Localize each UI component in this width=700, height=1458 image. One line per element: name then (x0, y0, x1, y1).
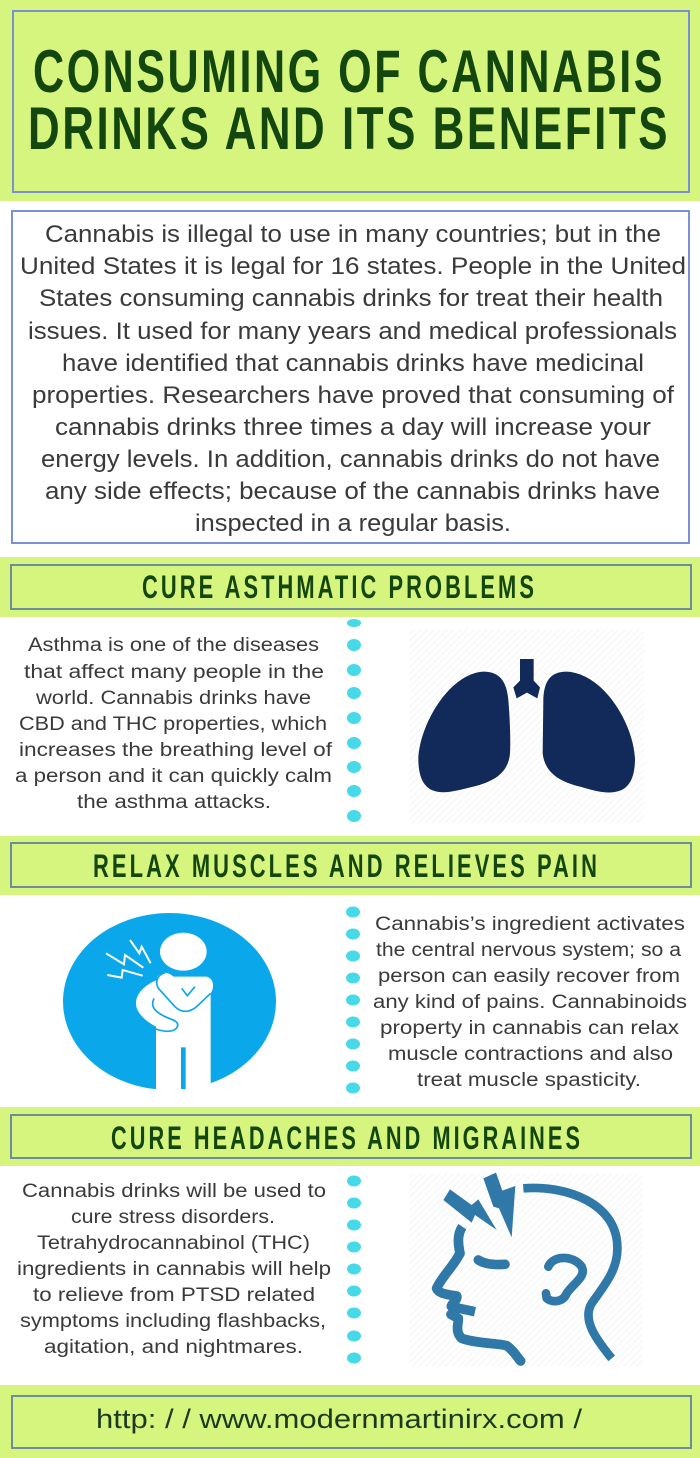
panel: introduction text: United States it is legal for 16 states. People in the United (20, 253, 686, 280)
icon: person with shoulder pain (63, 913, 276, 1090)
dotted divider: muscles (346, 906, 360, 1094)
text block: muscles: property in cannabis can relax (380, 1018, 680, 1039)
panel: introduction text: inspected in a regular basis. (195, 510, 511, 537)
text block: headaches: to relieve from PTSD related (33, 1285, 315, 1306)
text block: muscles: person can easily recover from (378, 966, 680, 987)
text block: muscles: treat muscle spasticity. (417, 1070, 641, 1091)
panel: title banner (0, 0, 700, 201)
panel: introduction text: States consuming cannabis drinks for treat their health (39, 285, 663, 312)
panel: heading relax muscles (0, 836, 700, 895)
title (28, 38, 670, 162)
text block: muscles: the central nervous system; so a (376, 940, 681, 961)
panel: introduction text: Cannabis is illegal to use in many countries; but in the (45, 221, 661, 248)
panel: heading cure asthmatic problems (0, 557, 700, 617)
text block: headaches: Cannabis drinks will be used to (22, 1181, 326, 1202)
text block: asthma: Asthma is one of the diseases (28, 635, 319, 656)
dotted divider: headaches (347, 1176, 361, 1364)
text block: muscles: any kind of pains. Cannabinoids (373, 992, 687, 1013)
panel: introduction text: properties. Researchers have proved that consuming of (32, 382, 674, 409)
text block: asthma: increases the breathing level of (19, 740, 333, 761)
panel: introduction text: energy levels. In addition, cannabis drinks do not have (41, 446, 660, 473)
dotted divider: asthma (347, 619, 361, 822)
text block: muscles: Cannabis’s ingredient activates (375, 914, 685, 935)
text block: asthma: CBD and THC properties, which (19, 714, 327, 735)
text block: asthma: that affect many people in the (24, 662, 324, 683)
panel: footer url: http: / / www.modernmartinirx.com / (96, 1404, 583, 1434)
panel: introduction text: cannabis drinks three times a day will increase your (55, 414, 651, 441)
icon: lungs (409, 629, 644, 823)
panel: heading cure headaches (0, 1107, 700, 1166)
icon: head with migraine bolts (409, 1173, 643, 1367)
text block: headaches: ingredients in cannabis will help (17, 1259, 331, 1280)
text block: asthma: the asthma attacks. (77, 792, 271, 813)
text block: muscles: muscle contractions and also (388, 1044, 673, 1065)
panel: introduction text: have identified that cannabis drinks have medicinal (62, 350, 644, 377)
text block: headaches (17, 1181, 331, 1358)
text block: asthma (15, 635, 333, 813)
text block: headaches: agitation, and nightmares. (44, 1337, 303, 1358)
panel: footer url (0, 1385, 700, 1458)
text block: headaches: symptoms including flashbacks, (20, 1311, 326, 1332)
panel: introduction text (12, 211, 689, 543)
panel: introduction text: issues. It used for many years and medical professionals (28, 318, 677, 345)
text block: asthma: world. Cannabis drinks have (35, 688, 311, 709)
text block: asthma: a person and it can quickly calm (15, 766, 332, 787)
text block: headaches: Tetrahydrocannabinol (THC) (37, 1233, 310, 1254)
text block: muscles (373, 914, 687, 1091)
text block: headaches: cure stress disorders. (71, 1207, 275, 1228)
panel: introduction text: any side effects; because of the cannabis drinks have (45, 478, 660, 505)
